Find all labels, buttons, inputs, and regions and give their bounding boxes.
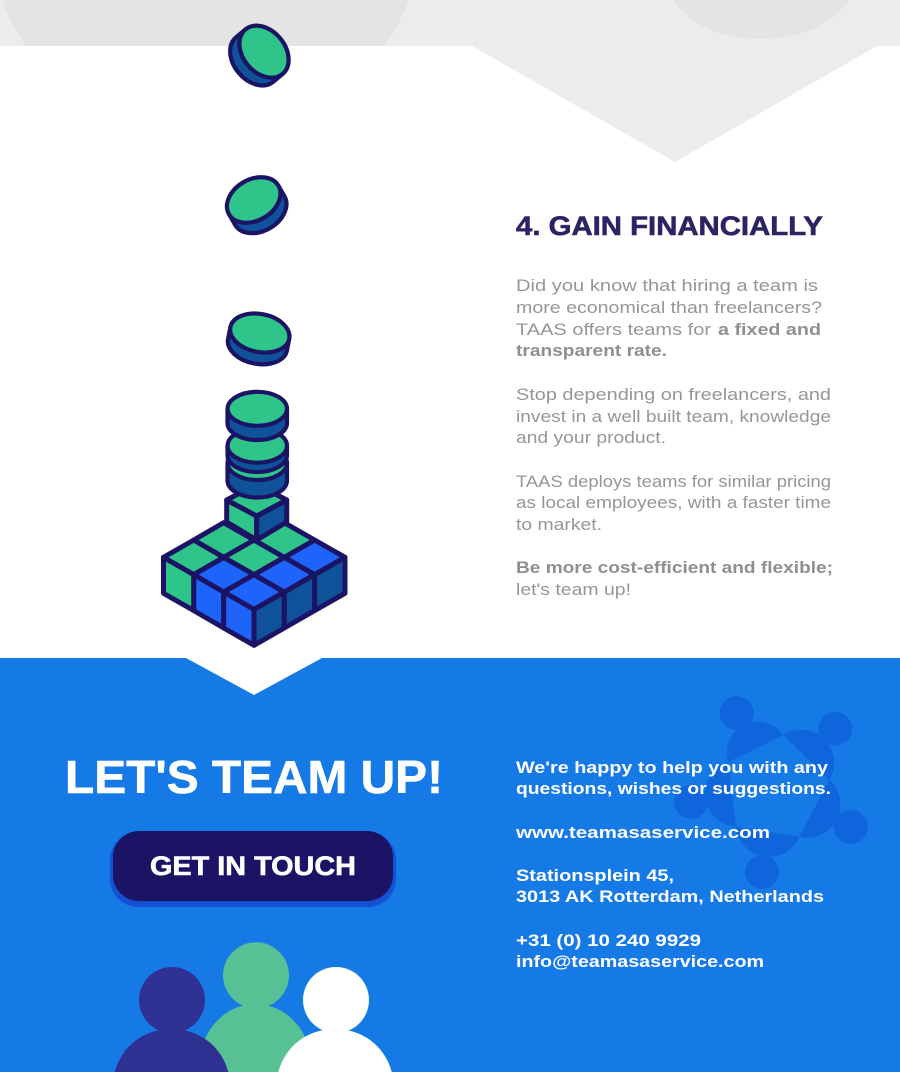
text block: paragraph 4: let's team up! (516, 581, 631, 599)
text block: paragraph 1: a fixed and (718, 321, 821, 339)
icon: falling coin 3 (224, 309, 293, 369)
person: navy (115, 967, 228, 1072)
button: get in touch (110, 831, 396, 907)
text block: paragraph 3 (516, 473, 831, 534)
text block: paragraph 1: TAAS offers teams for (516, 321, 712, 339)
button: get in touch: GET IN TOUCH (150, 851, 356, 881)
text block: paragraph 4 (516, 559, 833, 599)
text block: intro: We're happy to help you with any (516, 759, 829, 777)
text block: intro (516, 759, 831, 798)
right background circle (673, 0, 849, 39)
icon: team circle watermark (674, 696, 868, 889)
text block: phone and email: +31 (0) 10 240 9929 (516, 932, 701, 950)
text block: paragraph 4: Be more cost-efficient and flexible; (516, 559, 833, 577)
icon: falling coin 1 (220, 16, 299, 95)
text block: phone and email (516, 932, 764, 971)
icon: isometric block base with coin stack (164, 392, 345, 645)
base blocks (164, 523, 345, 645)
text block: paragraph 1 (516, 277, 822, 360)
text block: paragraph 1: Did you know that hiring a team is (516, 277, 818, 295)
text block: address (516, 867, 824, 906)
text block: address: 3013 AK Rotterdam, Netherlands (516, 888, 824, 906)
raised cube (227, 484, 287, 540)
text block: paragraph 1: transparent rate. (516, 342, 667, 360)
coin stack (228, 392, 287, 498)
text block: phone and email: info@teamasaservice.com (516, 953, 764, 971)
heading: let's team up: LET'S TEAM UP! (65, 751, 443, 803)
text block: intro: questions, wishes or suggestions. (516, 780, 831, 798)
text block: paragraph 3: to market. (516, 516, 602, 534)
text block: website: www.teamasaservice.com (515, 824, 770, 842)
person: green (196, 942, 315, 1072)
heading: gain financially: 4. GAIN FINANCIALLY (516, 211, 823, 241)
icon: three people (115, 942, 392, 1072)
text block: address: Stationsplein 45, (516, 867, 674, 885)
text block: paragraph 1: more economical than freelancers? (516, 299, 822, 317)
text block: paragraph 2: Stop depending on freelancers, and (516, 386, 831, 404)
text block: paragraph 2: invest in a well built team, knowledge (516, 408, 831, 426)
person: white (278, 967, 392, 1072)
panel: top grey band (0, 0, 900, 162)
left background circle (2, 0, 409, 46)
text block: paragraph 3: as local employees, with a faster time (516, 494, 831, 512)
text block: paragraph 3: TAAS deploys teams for similar pricing (516, 473, 831, 491)
icon: falling coin 2 (219, 168, 295, 242)
text block: paragraph 2: and your product. (516, 429, 666, 447)
text block: paragraph 2 (516, 386, 831, 447)
panel: blue contact section (0, 658, 900, 1072)
